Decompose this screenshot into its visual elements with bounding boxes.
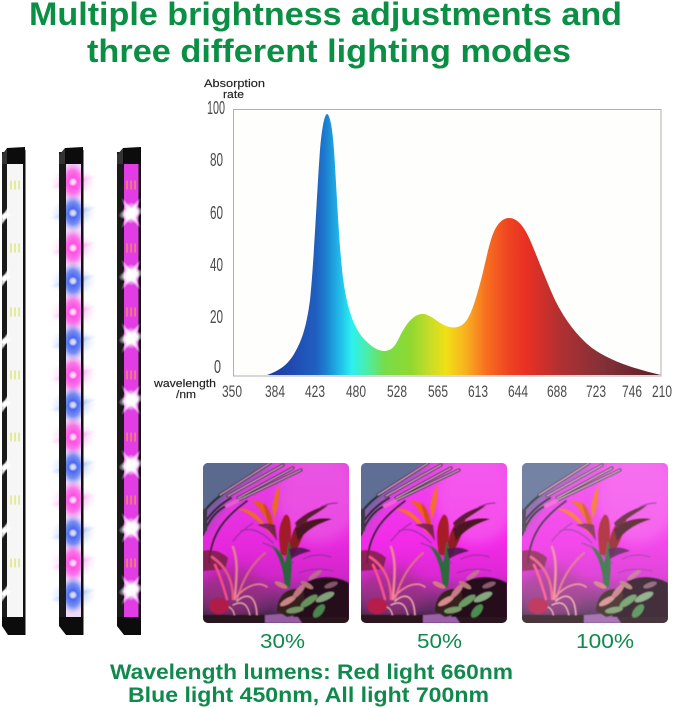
x axis title	[153, 378, 216, 401]
lamp: white mode	[0, 147, 26, 635]
y axis labels: 20	[210, 307, 223, 327]
y axis labels	[207, 98, 225, 377]
photo: 50% brightness	[359, 453, 516, 623]
y axis title: rate	[223, 89, 244, 101]
x axis labels: 644	[508, 382, 528, 401]
y axis labels: 60	[210, 203, 223, 223]
x axis labels: 350	[222, 382, 242, 401]
lamp: full spectrum mode	[117, 147, 145, 635]
title	[29, 0, 622, 69]
x axis title: /nm	[176, 389, 196, 401]
x axis labels: 528	[387, 382, 407, 401]
y axis title: Absorption	[204, 78, 265, 90]
y axis labels: 80	[210, 150, 223, 170]
x axis labels: 565	[428, 382, 448, 401]
title: three different lighting modes	[87, 33, 571, 69]
x axis labels	[222, 382, 672, 401]
spectrum curve	[267, 114, 661, 375]
x axis labels: 723	[586, 382, 606, 401]
photo: 100% brightness	[520, 453, 677, 623]
y axis labels: 0	[214, 357, 221, 377]
brightness labels: 30%	[260, 630, 305, 653]
x axis labels: 688	[547, 382, 567, 401]
lamp: red and blue mode	[48, 147, 98, 635]
x axis labels: 613	[468, 382, 488, 401]
y axis title	[204, 78, 265, 101]
y axis labels: 100	[207, 98, 225, 118]
x axis labels: 423	[305, 382, 325, 401]
x axis title: wavelength	[153, 378, 216, 390]
wavelength caption	[110, 661, 513, 707]
absorption spectrum chart	[153, 78, 672, 401]
brightness labels	[260, 630, 634, 653]
x axis labels: 746	[622, 382, 642, 401]
y axis labels: 40	[210, 255, 223, 275]
brightness labels: 50%	[417, 630, 462, 653]
brightness labels: 100%	[576, 630, 634, 653]
x axis labels: 480	[346, 382, 366, 401]
wavelength caption: Wavelength lumens: Red light 660nm	[110, 661, 513, 684]
photo: 30% brightness	[201, 453, 358, 623]
plot frame	[234, 110, 661, 376]
wavelength caption: Blue light 450nm, All light 700nm	[128, 684, 489, 707]
x axis labels: 384	[265, 382, 285, 401]
